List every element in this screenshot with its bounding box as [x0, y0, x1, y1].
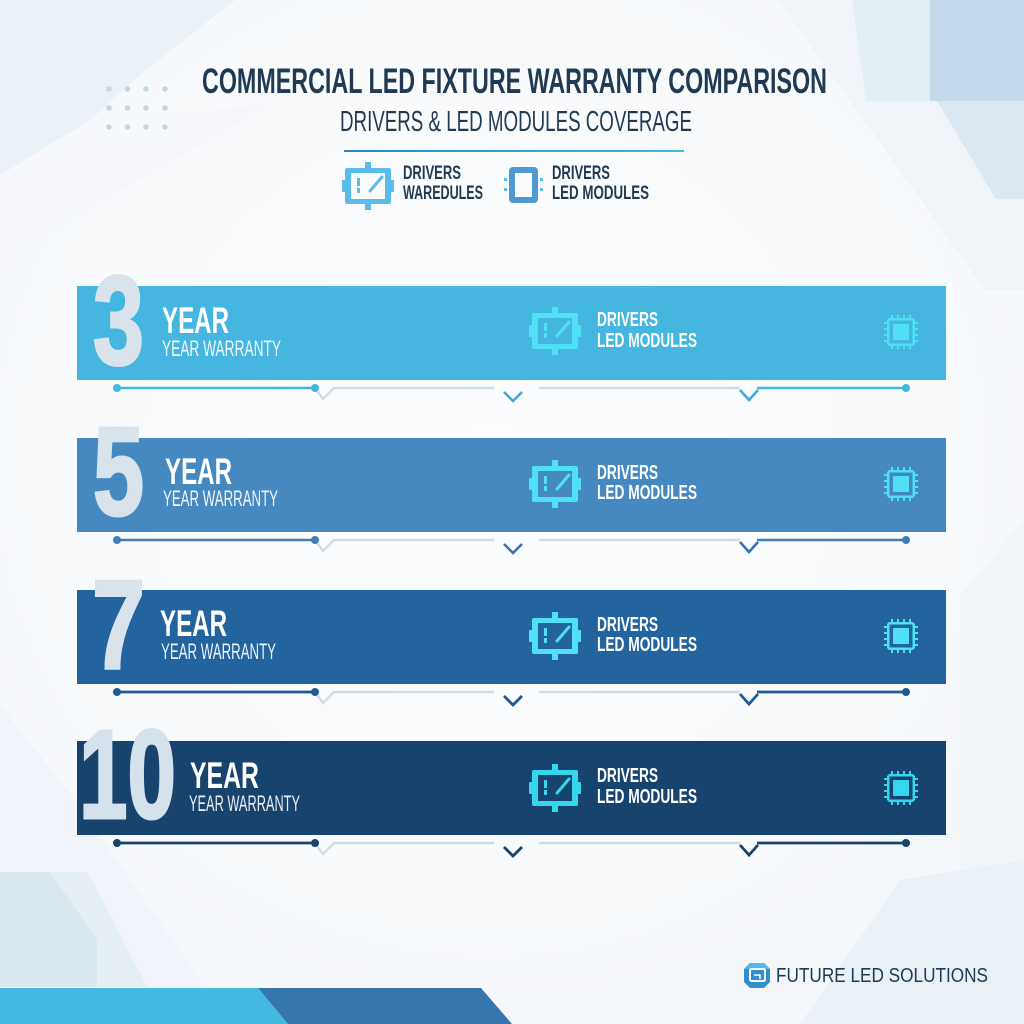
coverage text: DRIVERS: [597, 765, 658, 787]
legend text: drivers led modules: [552, 163, 649, 204]
icon: chip: [884, 467, 918, 501]
heading: YEAR: [190, 755, 259, 796]
panel: 5 year warranty: [77, 401, 946, 553]
legend text: drivers waredules: WAREDULES: [403, 183, 483, 204]
coverage text: [597, 309, 697, 352]
subheading: YEAR WARRANTY: [163, 486, 278, 511]
band: [77, 590, 946, 684]
coverage text: DRIVERS: [597, 309, 658, 331]
band: [77, 741, 946, 835]
subheading: YEAR WARRANTY: [161, 639, 276, 664]
subheading: YEAR WARRANTY: [189, 791, 300, 816]
coverage text: DRIVERS: [597, 614, 658, 636]
band: [77, 438, 946, 532]
icon: driver: [529, 460, 581, 508]
connector timeline: [113, 839, 910, 856]
legend text: drivers led modules: LED MODULES: [552, 183, 649, 204]
footer colour strip: [0, 988, 512, 1024]
coverage text: DRIVERS: [597, 462, 658, 484]
company name: FUTURE LED SOLUTIONS: [776, 965, 988, 987]
title divider: [344, 150, 684, 152]
icon: driver: [529, 764, 581, 812]
icon: chip: [884, 315, 918, 349]
big number 5: 5: [93, 401, 144, 542]
subheading: YEAR WARRANTY: [162, 336, 281, 361]
heading: YEAR: [160, 603, 227, 644]
icon: led module legend: [504, 167, 543, 203]
coverage text: LED MODULES: [597, 634, 697, 656]
connector timeline: [113, 688, 910, 705]
icon: driver: [529, 307, 581, 355]
band: [77, 286, 946, 380]
icon: driver legend: [342, 162, 394, 210]
coverage text: LED MODULES: [597, 482, 697, 504]
big number 7: 7: [92, 554, 145, 695]
legend text: drivers led modules: DRIVERS: [552, 163, 610, 184]
decorative dot grid: [106, 86, 168, 130]
heading: YEAR: [165, 451, 232, 492]
legend text: drivers waredules: DRIVERS: [403, 163, 461, 184]
coverage text: [597, 614, 697, 656]
legend: [342, 162, 649, 210]
panel: 7 year warranty: [77, 554, 946, 705]
coverage text: LED MODULES: [597, 330, 697, 352]
coverage text: [597, 462, 697, 504]
connector timeline: [113, 536, 910, 553]
big number 10: 10: [79, 704, 176, 845]
connector timeline: [113, 384, 910, 401]
legend text: drivers waredules: [403, 163, 483, 204]
heading: YEAR: [162, 300, 229, 341]
big number 3: 3: [93, 250, 144, 391]
icon: chip: [884, 771, 918, 805]
coverage text: LED MODULES: [597, 786, 697, 808]
icon: company logo: [744, 963, 770, 988]
icon: chip: [884, 619, 918, 653]
icon: driver: [529, 612, 581, 660]
panel: 10 year warranty: [77, 704, 946, 856]
subtitle: DRIVERS & LED MODULES COVERAGE: [340, 106, 692, 138]
panel: 3 year warranty: [77, 250, 946, 401]
coverage text: [597, 765, 697, 808]
